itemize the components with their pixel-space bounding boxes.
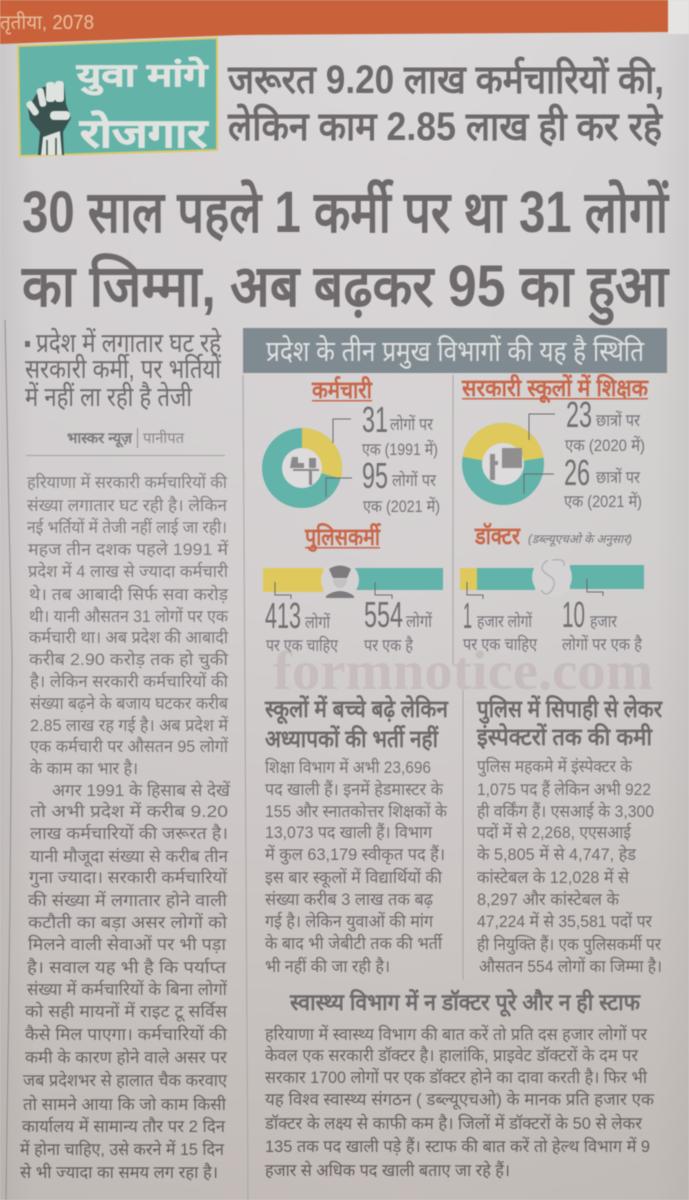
panel: school teachers: एक (2021 में) bbox=[564, 491, 642, 511]
left article text: अगर 1991 के हिसाब से देखें bbox=[52, 780, 231, 800]
article: schools: में कुल 63,179 स्वीकृत पद हैं। bbox=[265, 844, 445, 865]
panel header: three departments bbox=[243, 328, 667, 373]
left article text: थे। तब आबादी सिर्फ सवा करोड़ bbox=[29, 584, 229, 604]
article: schools: स्कूलों में बच्चे बढ़े लेकिन bbox=[264, 695, 449, 725]
panel: school teachers: छात्रों पर bbox=[596, 467, 641, 487]
badge: युवा मांगे रोजगार: युवा मांगे bbox=[76, 56, 208, 96]
article: schools: के बाद भी जेबीटी तक की भर्ती bbox=[265, 933, 443, 953]
watermark: formnotice.com bbox=[273, 640, 653, 701]
panel: employees: 95 bbox=[362, 455, 388, 496]
panel: doctors: (डब्ल्यूएचओ के अनुसार) bbox=[528, 532, 632, 547]
panel: police: लोगों bbox=[305, 612, 330, 632]
icon: police officer bbox=[326, 566, 354, 598]
left article text: नई भर्तियों में तेजी नहीं लाई जा रही। bbox=[27, 517, 227, 537]
left article text: लाख कर्मचारियों की जरूरत है। bbox=[30, 823, 228, 843]
left article text: संख्या बढ़ने के बजाय घटकर करीब bbox=[30, 693, 228, 713]
top date band bbox=[0, 0, 668, 44]
panel: doctors: डॉक्टर bbox=[474, 522, 521, 550]
left article text: कर्मचारी था। अब प्रदेश की आबादी bbox=[29, 627, 229, 647]
panel: employees: एक (2021 में) bbox=[363, 496, 440, 516]
article: health: 135 तक पद खाली पड़े हैं। स्टाफ की बात करें तो हेल्थ विभाग में 9 bbox=[265, 1136, 650, 1156]
article: health: सरकार 1700 लोगों पर एक डॉक्टर होने का दावा करती है। फिर भी bbox=[265, 1067, 648, 1087]
left article text: है। सवाल यह भी है कि पर्याप्त bbox=[27, 957, 226, 977]
bar: police ratio bbox=[263, 561, 443, 599]
badge: युवा मांगे रोजगार bbox=[18, 38, 217, 156]
article: police: औसतन 554 लोगों का जिम्मा है। bbox=[479, 956, 662, 976]
left article text: एक कर्मचारी पर औसतन 95 लोगों bbox=[30, 736, 229, 756]
panel: school teachers: 26 bbox=[564, 452, 590, 493]
left article text: कटौती का बड़ा असर लोगों को bbox=[28, 912, 228, 932]
panel: school teachers: सरकारी स्कूलों में शिक्षक bbox=[461, 374, 649, 404]
panel: employees: 31 bbox=[362, 399, 388, 440]
panel: doctors: 10 bbox=[562, 594, 585, 635]
left article text: तो अभी प्रदेश में करीब 9.20 bbox=[30, 801, 228, 821]
article: police: ही वर्किंग हैं। एसआई के 3,300 bbox=[477, 801, 654, 821]
left article text: महज तीन दशक पहले 1991 में bbox=[28, 539, 229, 559]
bar: doctor ratio bbox=[460, 557, 644, 597]
left article text: संख्या लगातार घट रही है। लेकिन bbox=[27, 495, 228, 515]
article: schools: पद खाली हैं। इनमें हेडमास्टर के bbox=[265, 779, 444, 799]
left article text: प्रदेश में 4 लाख से ज्यादा कर्मचारी bbox=[28, 561, 229, 581]
panel: police bbox=[263, 523, 443, 655]
panel: employees: लोगों पर bbox=[390, 414, 434, 434]
top date band: तृतीया, 2078 bbox=[0, 11, 94, 35]
panel: doctors: पर एक चाहिए bbox=[463, 634, 538, 654]
left article text: 2.85 लाख रह गई है। अब प्रदेश में bbox=[30, 715, 229, 735]
article: schools: भी नहीं की जा रही है। bbox=[265, 956, 390, 976]
panel: police: 413 bbox=[265, 595, 301, 636]
article: police: पुलिस में सिपाही से लेकर bbox=[476, 695, 663, 724]
article: police: पुलिस महकमे में इंस्पेक्टर के bbox=[477, 756, 633, 777]
panel: police: पर एक चाहिए bbox=[266, 635, 338, 655]
left intro deck: प्रदेश में लगातार घट रहे bbox=[36, 327, 222, 358]
panel: employees: एक (1991 में) bbox=[362, 439, 438, 459]
left article text bbox=[20, 472, 231, 1182]
left article text: कैसे मिल पाएगा। कर्मचारियों की bbox=[25, 1024, 228, 1044]
article: schools: 13,073 पद खाली हैं। विभाग bbox=[265, 822, 432, 842]
panel: doctors: 1 bbox=[463, 595, 472, 636]
donut chart: teachers bbox=[467, 428, 539, 500]
article: police: के 5,805 में से 4,747, हेड bbox=[477, 844, 637, 864]
panel: doctors: हजार bbox=[590, 612, 618, 631]
panel: police: पर एक है bbox=[364, 635, 414, 655]
subheadline bbox=[227, 56, 664, 149]
article: schools: गई है। लेकिन युवाओं की मांग bbox=[265, 911, 433, 932]
main headline bbox=[21, 179, 670, 326]
article: schools: इस बार स्कूलों में विद्यार्थियों की bbox=[265, 867, 443, 888]
left article text: के काम का भार है। bbox=[30, 758, 138, 778]
icon: raised fist bbox=[25, 81, 71, 155]
left intro deck: सरकारी कर्मी, पर भर्तियों bbox=[25, 353, 222, 384]
left article text: संख्या में कर्मचारियों के बिना लोगों bbox=[27, 979, 228, 999]
left article text: है। लेकिन सरकारी कर्मचारियों की bbox=[30, 671, 229, 691]
panel: employees: लोगों पर bbox=[392, 470, 437, 490]
left article text: कमी के कारण होने वाले असर पर bbox=[25, 1047, 228, 1067]
left article text: कार्यालय में सामान्य तौर पर 2 दिन bbox=[22, 1116, 226, 1136]
left article text: मिलने वाली सेवाओं पर भी पड़ा bbox=[28, 934, 227, 954]
article: schools: शिक्षा विभाग में अभी 23,696 bbox=[265, 757, 431, 777]
article: police bbox=[476, 695, 663, 976]
left article text: तो सामने आया कि जो काम किसी bbox=[23, 1094, 227, 1114]
article: health bbox=[264, 988, 655, 1180]
left article text: थी। यानी औसतन 31 लोगों पर एक bbox=[29, 606, 229, 626]
byline: पानीपत bbox=[143, 429, 184, 447]
left article text: को सही मायनों में राइट टू सर्विस bbox=[25, 1001, 228, 1022]
byline bbox=[26, 428, 225, 456]
panel: school teachers: एक (2020 में) bbox=[565, 435, 645, 455]
donut chart: employees bbox=[272, 438, 332, 498]
panel: doctors: लोगों पर एक है bbox=[562, 634, 643, 654]
panel: employees: कर्मचारी bbox=[311, 376, 373, 404]
article: schools bbox=[264, 695, 449, 976]
left intro deck: में नहीं ला रही है तेजी bbox=[25, 381, 193, 412]
left article text: हरियाणा में सरकारी कर्मचारियों की bbox=[27, 472, 228, 492]
panel: school teachers: 23 bbox=[566, 394, 592, 435]
article: schools: संख्या करीब 3 लाख तक बढ़ bbox=[265, 889, 433, 909]
article: health: स्वास्थ्य विभाग में न डॉक्टर पूरे और न ही स्टाफ bbox=[289, 988, 641, 1017]
badge: युवा मांगे रोजगार: रोजगार bbox=[79, 110, 209, 156]
left article text: की संख्या में लगातार होने वाली bbox=[28, 890, 228, 910]
left article text: से भी ज्यादा का समय लग रहा है। bbox=[20, 1162, 218, 1182]
article: police: 8,297 और कांस्टेबल के bbox=[477, 889, 620, 909]
article: police: 47,224 में से 35,581 पदों पर bbox=[477, 911, 653, 931]
left article text: जब प्रदेशभर से हालात चैक करवाए bbox=[23, 1070, 228, 1090]
panel: doctors: हजार लोगों bbox=[477, 611, 532, 631]
article: police: 1,075 पद हैं लेकिन अभी 922 bbox=[477, 779, 651, 799]
article: health: हरियाणा में स्वास्थ्य विभाग की बात करें तो प्रति दस हजार लोगों पर bbox=[265, 1024, 648, 1044]
left article text: करीब 2.90 करोड़ तक हो चुकी bbox=[29, 649, 229, 670]
panel: police: 554 bbox=[364, 594, 403, 635]
article: schools: 155 और स्नातकोत्तर शिक्षकों के bbox=[265, 801, 448, 821]
panel: employees bbox=[272, 376, 440, 516]
byline: भास्कर न्यूज़ bbox=[67, 430, 133, 448]
article: schools: अध्यापकों की भर्ती नहीं bbox=[265, 725, 439, 753]
icon: stethoscope bbox=[541, 560, 564, 594]
left intro deck bbox=[25, 327, 222, 412]
panel: police: पुलिसकर्मी bbox=[304, 523, 381, 552]
panel: doctors bbox=[460, 522, 644, 654]
article: police: इंस्पेक्टरों तक की कमी bbox=[476, 723, 653, 751]
left article text: में होना चाहिए, उसे करने में 15 दिन bbox=[20, 1139, 225, 1159]
article: police: ही नियुक्ति हैं। एक पुलिसकर्मी पर bbox=[477, 934, 662, 955]
article: health: हजार से अधिक पद खाली बताए जा रहे हैं। bbox=[265, 1160, 510, 1180]
panel: school teachers bbox=[461, 374, 649, 511]
left article text: गुना ज्यादा। सरकारी कर्मचारियों bbox=[29, 867, 228, 888]
left article text: यानी मौजूदा संख्या से करीब तीन bbox=[30, 846, 229, 867]
article: health: यह विश्व स्वास्थ्य संगठन ( डब्ल्यूएचओ) के मानक प्रति हजार एक bbox=[265, 1089, 655, 1110]
article: police: पदों में से 2,268, एएसआई bbox=[477, 822, 632, 842]
article: police: कांस्टेबल के 12,028 में से bbox=[477, 867, 629, 887]
article: health: केवल एक सरकारी डॉक्टर है। हालांकि, प्राइवेट डॉक्टरों के दम पर bbox=[265, 1045, 639, 1065]
panel: school teachers: छात्रों पर bbox=[596, 410, 641, 430]
article: health: डॉक्टर के लक्ष्य से काफी कम है। जिलों में डॉक्टरों के 50 से लेकर bbox=[264, 1113, 643, 1133]
panel: police: लोगों bbox=[406, 611, 433, 631]
